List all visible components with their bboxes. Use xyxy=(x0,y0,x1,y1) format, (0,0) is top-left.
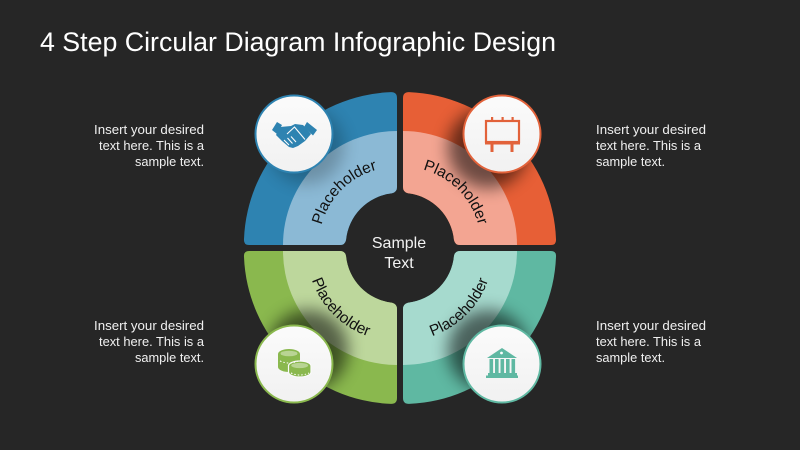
text block: top-right: text here. This is a xyxy=(596,139,701,153)
panel: top-left blue segment xyxy=(244,92,397,245)
text block: top-right xyxy=(596,123,706,169)
text block: bottom-right: text here. This is a xyxy=(596,335,701,349)
text block: bottom-left: sample text. xyxy=(135,351,204,365)
icon: handshake badge xyxy=(256,96,332,172)
text block: bottom-right: sample text. xyxy=(596,351,665,365)
icon: bank badge xyxy=(464,326,540,402)
text block: bottom-right xyxy=(596,319,706,365)
text block: bottom-left: text here. This is a xyxy=(99,335,204,349)
text block: top-left: sample text. xyxy=(135,155,204,169)
text block: top-left: text here. This is a xyxy=(99,139,204,153)
text block: top-right: sample text. xyxy=(596,155,665,169)
title: 4 Step Circular Diagram Infographic Design xyxy=(40,27,556,57)
text block: top-right: Insert your desired xyxy=(596,123,706,137)
text block: top-left xyxy=(94,123,204,169)
text block: bottom-left xyxy=(94,319,204,365)
panel: top-right orange segment xyxy=(403,92,556,245)
segment label: placeholder: Placeholder xyxy=(312,162,375,224)
center label: Sample xyxy=(372,235,426,252)
panel: bottom-right teal segment xyxy=(403,251,556,404)
segment label: placeholder: Placeholder xyxy=(429,278,488,336)
segment label: placeholder: Placeholder xyxy=(312,277,370,336)
icon: billboard badge xyxy=(464,96,540,172)
icon: coins badge xyxy=(256,326,332,402)
panel: bottom-left green segment xyxy=(244,251,397,404)
text block: bottom-right: Insert your desired xyxy=(596,319,706,333)
text block: top-left: Insert your desired xyxy=(94,123,204,137)
center label: Text xyxy=(384,255,414,272)
text block: bottom-left: Insert your desired xyxy=(94,319,204,333)
segment label: placeholder: Placeholder xyxy=(424,160,486,223)
